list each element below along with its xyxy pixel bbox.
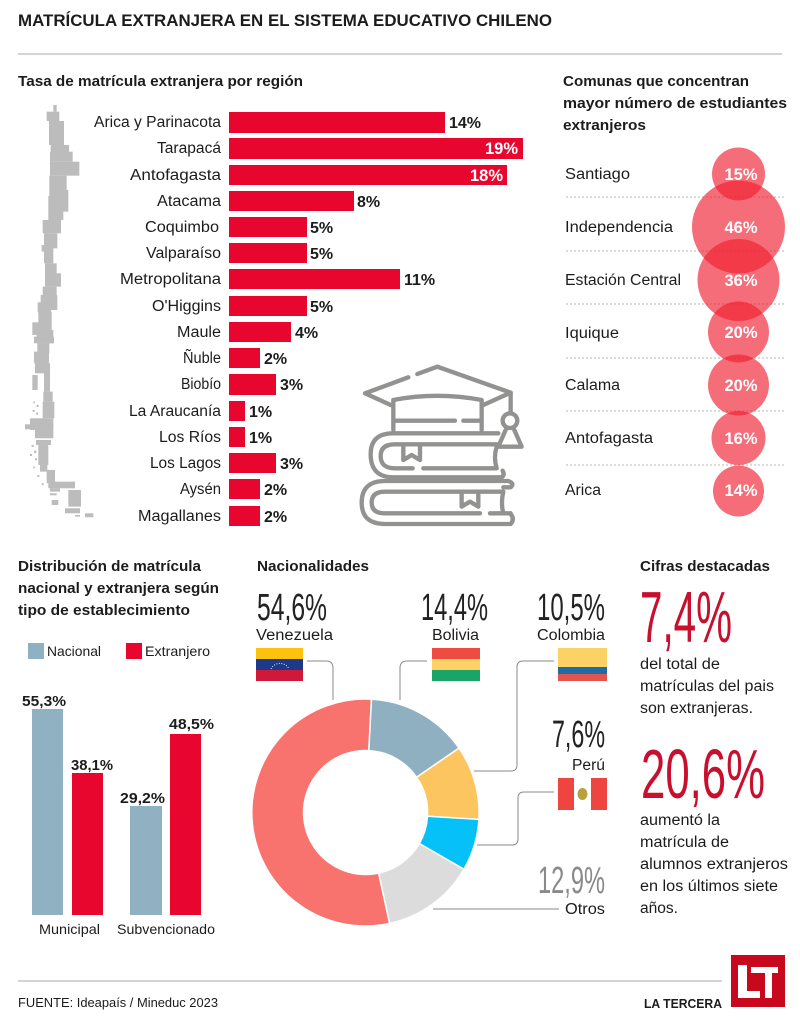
bar chart: rows: Magallanes (138, 508, 221, 525)
commune values: 14% (724, 482, 758, 500)
commune names: Antofagasta (565, 430, 653, 447)
bar chart: rows: 11% (404, 272, 435, 289)
commune values: 20% (724, 377, 758, 395)
bar chart: rows: Los Ríos (159, 429, 221, 446)
bar chart: rows (94, 112, 523, 526)
bar chart: rows: 14% (449, 115, 481, 132)
bar chart: rows: 1% (249, 404, 272, 421)
commune names: Estación Central (565, 272, 681, 289)
label: Colombia (537, 587, 607, 681)
bar chart: rows: 5% (310, 299, 333, 316)
commune names (565, 166, 681, 499)
heading: distribution: Distribución de matrícula (18, 559, 202, 575)
label: Colombia: 10,5% (537, 587, 605, 629)
label: Bolivia: 14,4% (421, 587, 488, 629)
segment: Colombia (417, 748, 479, 819)
bar chart: rows: 1% (249, 430, 272, 447)
label: Venezuela (256, 587, 333, 681)
commune names: Iquique (565, 325, 619, 342)
bar chart: rows: 18% (470, 167, 503, 185)
label: Perú (552, 714, 607, 810)
title: MATRÍCULA EXTRANJERA EN EL SISTEMA EDUCATIVO CHILENO (18, 11, 552, 30)
heading: communes: extranjeros (563, 118, 646, 134)
figure: 7,4%: son extranjeras. (640, 700, 753, 717)
panel: key figures (640, 559, 788, 917)
logo (731, 955, 785, 1007)
bar values: 55,3% (22, 693, 66, 710)
commune values: 16% (724, 430, 758, 448)
commune values: 46% (724, 219, 758, 237)
brand name: LA TERCERA (644, 997, 722, 1011)
bar chart: rows: Tarapacá (157, 140, 221, 157)
bar chart: rows: Ñuble (183, 350, 221, 367)
source: FUENTE: Ideapaís / Mineduc 2023 (18, 995, 218, 1010)
bars (32, 709, 201, 915)
label: Otros: 12,9% (538, 860, 605, 902)
heading: communes: mayor número de estudiantes (563, 96, 787, 112)
panel: nationalities donut (252, 559, 607, 926)
bar chart: rows: Atacama (157, 193, 221, 210)
label: Venezuela: Venezuela (256, 627, 333, 644)
bar chart: rows: 2% (264, 351, 287, 368)
heading: key figures: Cifras destacadas (640, 559, 770, 575)
label: Otros (538, 860, 605, 918)
heading: distribution: nacional y extranjera según (18, 581, 219, 597)
heading: regional rate: Tasa de matrícula extranjera por región (18, 74, 303, 90)
bar chart: rows: La Araucanía (129, 403, 221, 420)
panel: regional bar chart (18, 74, 523, 526)
figure: 20,6%: alumnos extranjeros (640, 856, 788, 873)
leader lines (307, 661, 559, 909)
heading: communes: Comunas que concentran (563, 74, 749, 90)
commune names: Santiago (565, 166, 630, 183)
bubbles (692, 148, 785, 516)
commune values: 36% (724, 272, 758, 290)
bar chart: rows: 19% (485, 140, 518, 158)
bar chart: rows: Maule (177, 324, 221, 341)
footer (18, 955, 785, 1011)
bar chart: rows: 3% (280, 456, 303, 473)
donut chart (252, 699, 479, 926)
commune values: 20% (724, 324, 758, 342)
figure: 7,4%: 7,4% (640, 578, 732, 658)
label: Perú: 7,6% (552, 714, 605, 756)
bar values: 29,2% (120, 790, 165, 807)
icon: map of Chile (25, 105, 93, 517)
segment: Otros (379, 844, 464, 923)
category labels: Subvencionado (117, 921, 215, 937)
bar chart: rows: 5% (310, 246, 333, 263)
bar chart: rows: Aysén (180, 481, 221, 498)
label: Bolivia: Bolivia (432, 627, 479, 644)
segment: Bolivia (369, 699, 459, 777)
segment: Venezuela (252, 699, 390, 926)
legend (28, 643, 210, 659)
icon: books and graduation cap (362, 367, 522, 524)
figure: 7,4% (640, 578, 774, 717)
figure: 20,6%: en los últimos siete (640, 878, 778, 895)
panel: communes bubble chart (563, 74, 787, 516)
legend: Nacional (47, 643, 101, 659)
heading: nationalities: Nacionalidades (257, 559, 369, 575)
bar chart: rows: 3% (280, 377, 303, 394)
category labels: Municipal (39, 921, 100, 937)
bar chart: rows: Arica y Parinacota (94, 114, 221, 131)
bar chart: rows: O'Higgins (152, 298, 221, 315)
commune values (724, 166, 758, 500)
bar chart: rows: Antofagasta (130, 167, 221, 184)
bar chart: rows: Biobío (181, 376, 221, 393)
commune names: Arica (565, 482, 601, 499)
commune names: Independencia (565, 219, 673, 236)
figure: 7,4%: del total de (640, 656, 720, 673)
commune values: 15% (724, 166, 758, 184)
figure: 20,6%: matrícula de (640, 834, 729, 851)
label: Venezuela: 54,6% (257, 587, 327, 629)
figure: 20,6%: años. (640, 900, 678, 917)
label: Otros: Otros (565, 901, 605, 918)
bar chart: rows: 5% (310, 220, 333, 237)
panel: national vs foreign by school type (18, 559, 219, 937)
category labels (39, 921, 215, 937)
bar chart: rows: 2% (264, 482, 287, 499)
bar chart: rows: 2% (264, 509, 287, 526)
bar chart: rows: Coquimbo (145, 219, 219, 236)
bar chart: rows: Valparaíso (146, 245, 221, 262)
bar values: 48,5% (169, 716, 214, 733)
bar values: 38,1% (71, 757, 113, 774)
label: Perú: Perú (572, 757, 605, 774)
figure: 20,6% (640, 735, 788, 917)
bar chart: rows: Los Lagos (150, 455, 221, 472)
label: Bolivia (421, 587, 488, 681)
figure: 7,4%: matrículas del pais (640, 678, 774, 695)
bar chart: rows: 8% (357, 194, 380, 211)
label: Colombia: Colombia (537, 627, 605, 644)
segment: Perú (419, 816, 479, 869)
commune names: Calama (565, 377, 620, 394)
bar chart: rows: 4% (295, 325, 318, 342)
heading: distribution: tipo de establecimiento (18, 603, 190, 619)
bar values (22, 693, 214, 807)
legend: Extranjero (145, 643, 210, 659)
figure: 20,6%: aumentó la (640, 812, 720, 829)
bar chart: rows: Metropolitana (120, 271, 221, 288)
